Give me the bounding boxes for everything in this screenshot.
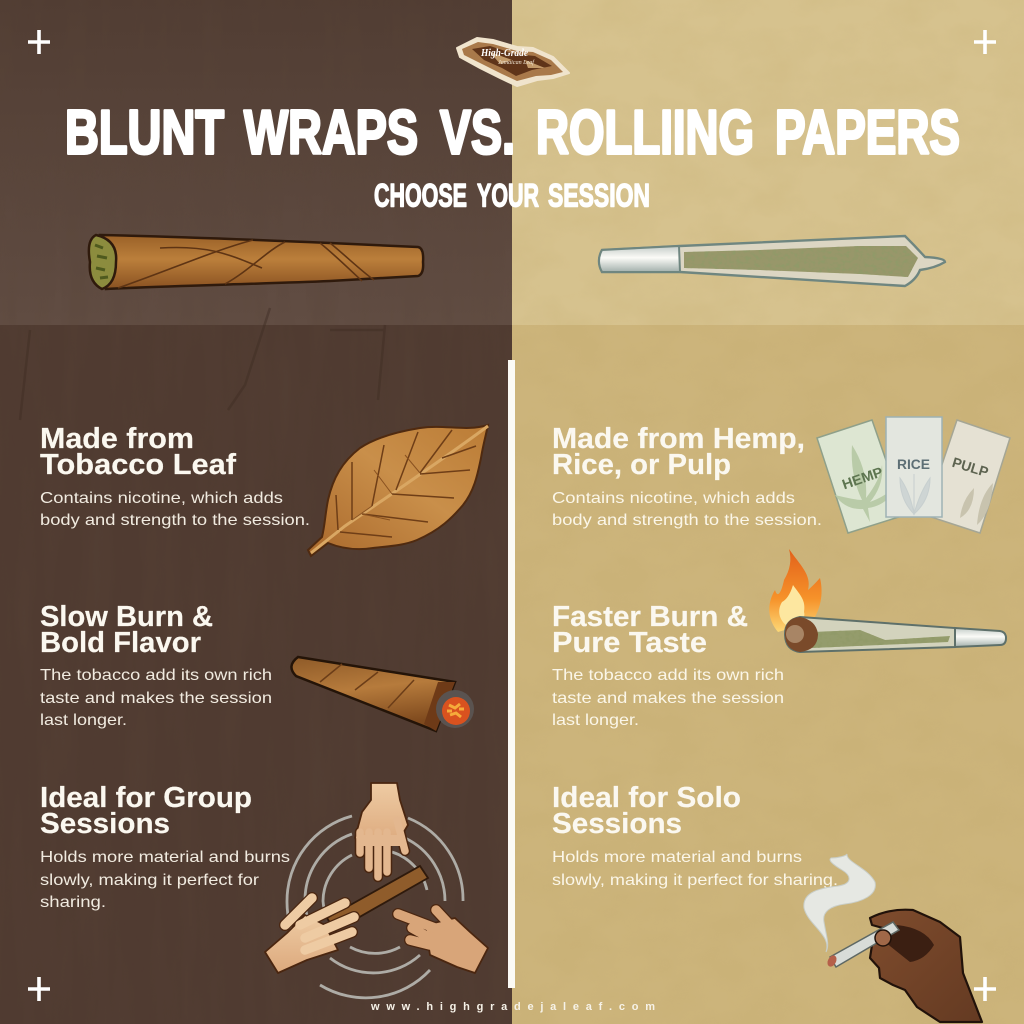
item: ideal for group sessions: Sessions (40, 808, 170, 840)
subtitle: SESSION (548, 177, 650, 213)
item: faster burn and pure taste: last longer. (552, 712, 639, 729)
item: made from hemp, rice, or pulp: Made from Hemp, (552, 423, 805, 455)
item: ideal for group sessions: sharing. (40, 894, 106, 911)
icon: corner plus top left (28, 30, 50, 54)
icon: hemp, rice, pulp paper packs: HEMP (840, 464, 885, 492)
footer website url: www.highgradejaleaf.com (370, 1001, 655, 1013)
icon: hands passing blunt around rings (265, 783, 488, 998)
title (65, 99, 960, 168)
title: WRAPS (244, 99, 418, 168)
item: made from tobacco leaf (40, 423, 310, 529)
hand: right (398, 910, 488, 973)
illustration: rolled paper joint (599, 236, 945, 286)
icon: hemp, rice, pulp paper packs: PULP (950, 454, 990, 480)
title: ROLLIING (536, 99, 754, 168)
item: slow burn and bold flavor: taste and makes the session (40, 690, 272, 707)
item: ideal for solo sessions: Holds more material and burns (552, 849, 802, 866)
item: slow burn and bold flavor: The tobacco add its own rich (40, 667, 272, 684)
item: ideal for solo sessions: Ideal for Solo (552, 782, 741, 814)
item: ideal for group sessions: Holds more material and burns (40, 849, 290, 866)
illustration: rolled blunt (89, 235, 423, 289)
item: faster burn and pure taste: The tobacco add its own rich (552, 667, 784, 684)
title: BLUNT (65, 99, 224, 168)
center divider (508, 360, 515, 988)
item: made from hemp, rice, or pulp: Rice, or Pulp (552, 449, 731, 481)
logo: Jamaica map badge (457, 38, 569, 86)
item: ideal for group sessions (40, 782, 290, 911)
title: VS. (440, 99, 515, 168)
item: made from tobacco leaf: Made from (40, 423, 194, 455)
icon: hemp, rice, pulp paper packs (817, 417, 1010, 533)
item: faster burn and pure taste: Faster Burn & (552, 601, 748, 633)
item: faster burn and pure taste: Pure Taste (552, 627, 707, 659)
item: ideal for solo sessions: Sessions (552, 808, 682, 840)
hand: left (265, 898, 354, 973)
icon: burning joint with flame (769, 549, 1006, 652)
title: PAPERS (775, 99, 960, 168)
item: slow burn and bold flavor: Bold Flavor (40, 627, 201, 659)
item: made from tobacco leaf: Contains nicotine, which adds (40, 490, 283, 507)
item: made from tobacco leaf: body and strength to the session. (40, 512, 310, 529)
logo: Jamaica map badge: High-Grade (480, 47, 528, 59)
icon: lit blunt (291, 657, 474, 731)
item: made from tobacco leaf: Tobacco Leaf (40, 449, 236, 481)
icon: hemp, rice, pulp paper packs: RICE (897, 456, 930, 472)
item: made from hemp, rice, or pulp: body and strength to the session. (552, 512, 822, 529)
item: faster burn and pure taste (552, 601, 784, 729)
subtitle (374, 177, 650, 213)
hand: top (355, 783, 408, 877)
icon: hand holding joint with smoke (804, 854, 982, 1022)
subtitle: CHOOSE (374, 177, 467, 213)
item: made from hemp, rice, or pulp (552, 423, 822, 529)
item: ideal for solo sessions: slowly, making it perfect for sharing. (552, 872, 838, 889)
item: faster burn and pure taste: taste and makes the session (552, 690, 784, 707)
logo: Jamaica map badge: Jamaican Leaf (498, 59, 535, 66)
item: slow burn and bold flavor: Slow Burn & (40, 601, 213, 633)
icon: corner plus top right (974, 30, 996, 54)
column: rolling papers (552, 417, 1010, 1022)
column: blunt wraps (40, 423, 488, 998)
panel: rolling papers background (512, 0, 1024, 1024)
item: ideal for solo sessions (552, 782, 838, 889)
subtitle: YOUR (477, 177, 539, 213)
item: slow burn and bold flavor (40, 601, 272, 729)
item: ideal for group sessions: slowly, making it perfect for (40, 872, 260, 889)
icon: corner plus bottom left (28, 977, 50, 1001)
blunt held by hands (327, 866, 428, 931)
panel: blunt wraps background (0, 0, 512, 1024)
icon: tobacco leaf (308, 425, 488, 556)
icon: corner plus bottom right (974, 977, 996, 1001)
item: ideal for group sessions: Ideal for Group (40, 782, 252, 814)
item: slow burn and bold flavor: last longer. (40, 712, 127, 729)
item: made from hemp, rice, or pulp: Contains nicotine, which adds (552, 490, 795, 507)
